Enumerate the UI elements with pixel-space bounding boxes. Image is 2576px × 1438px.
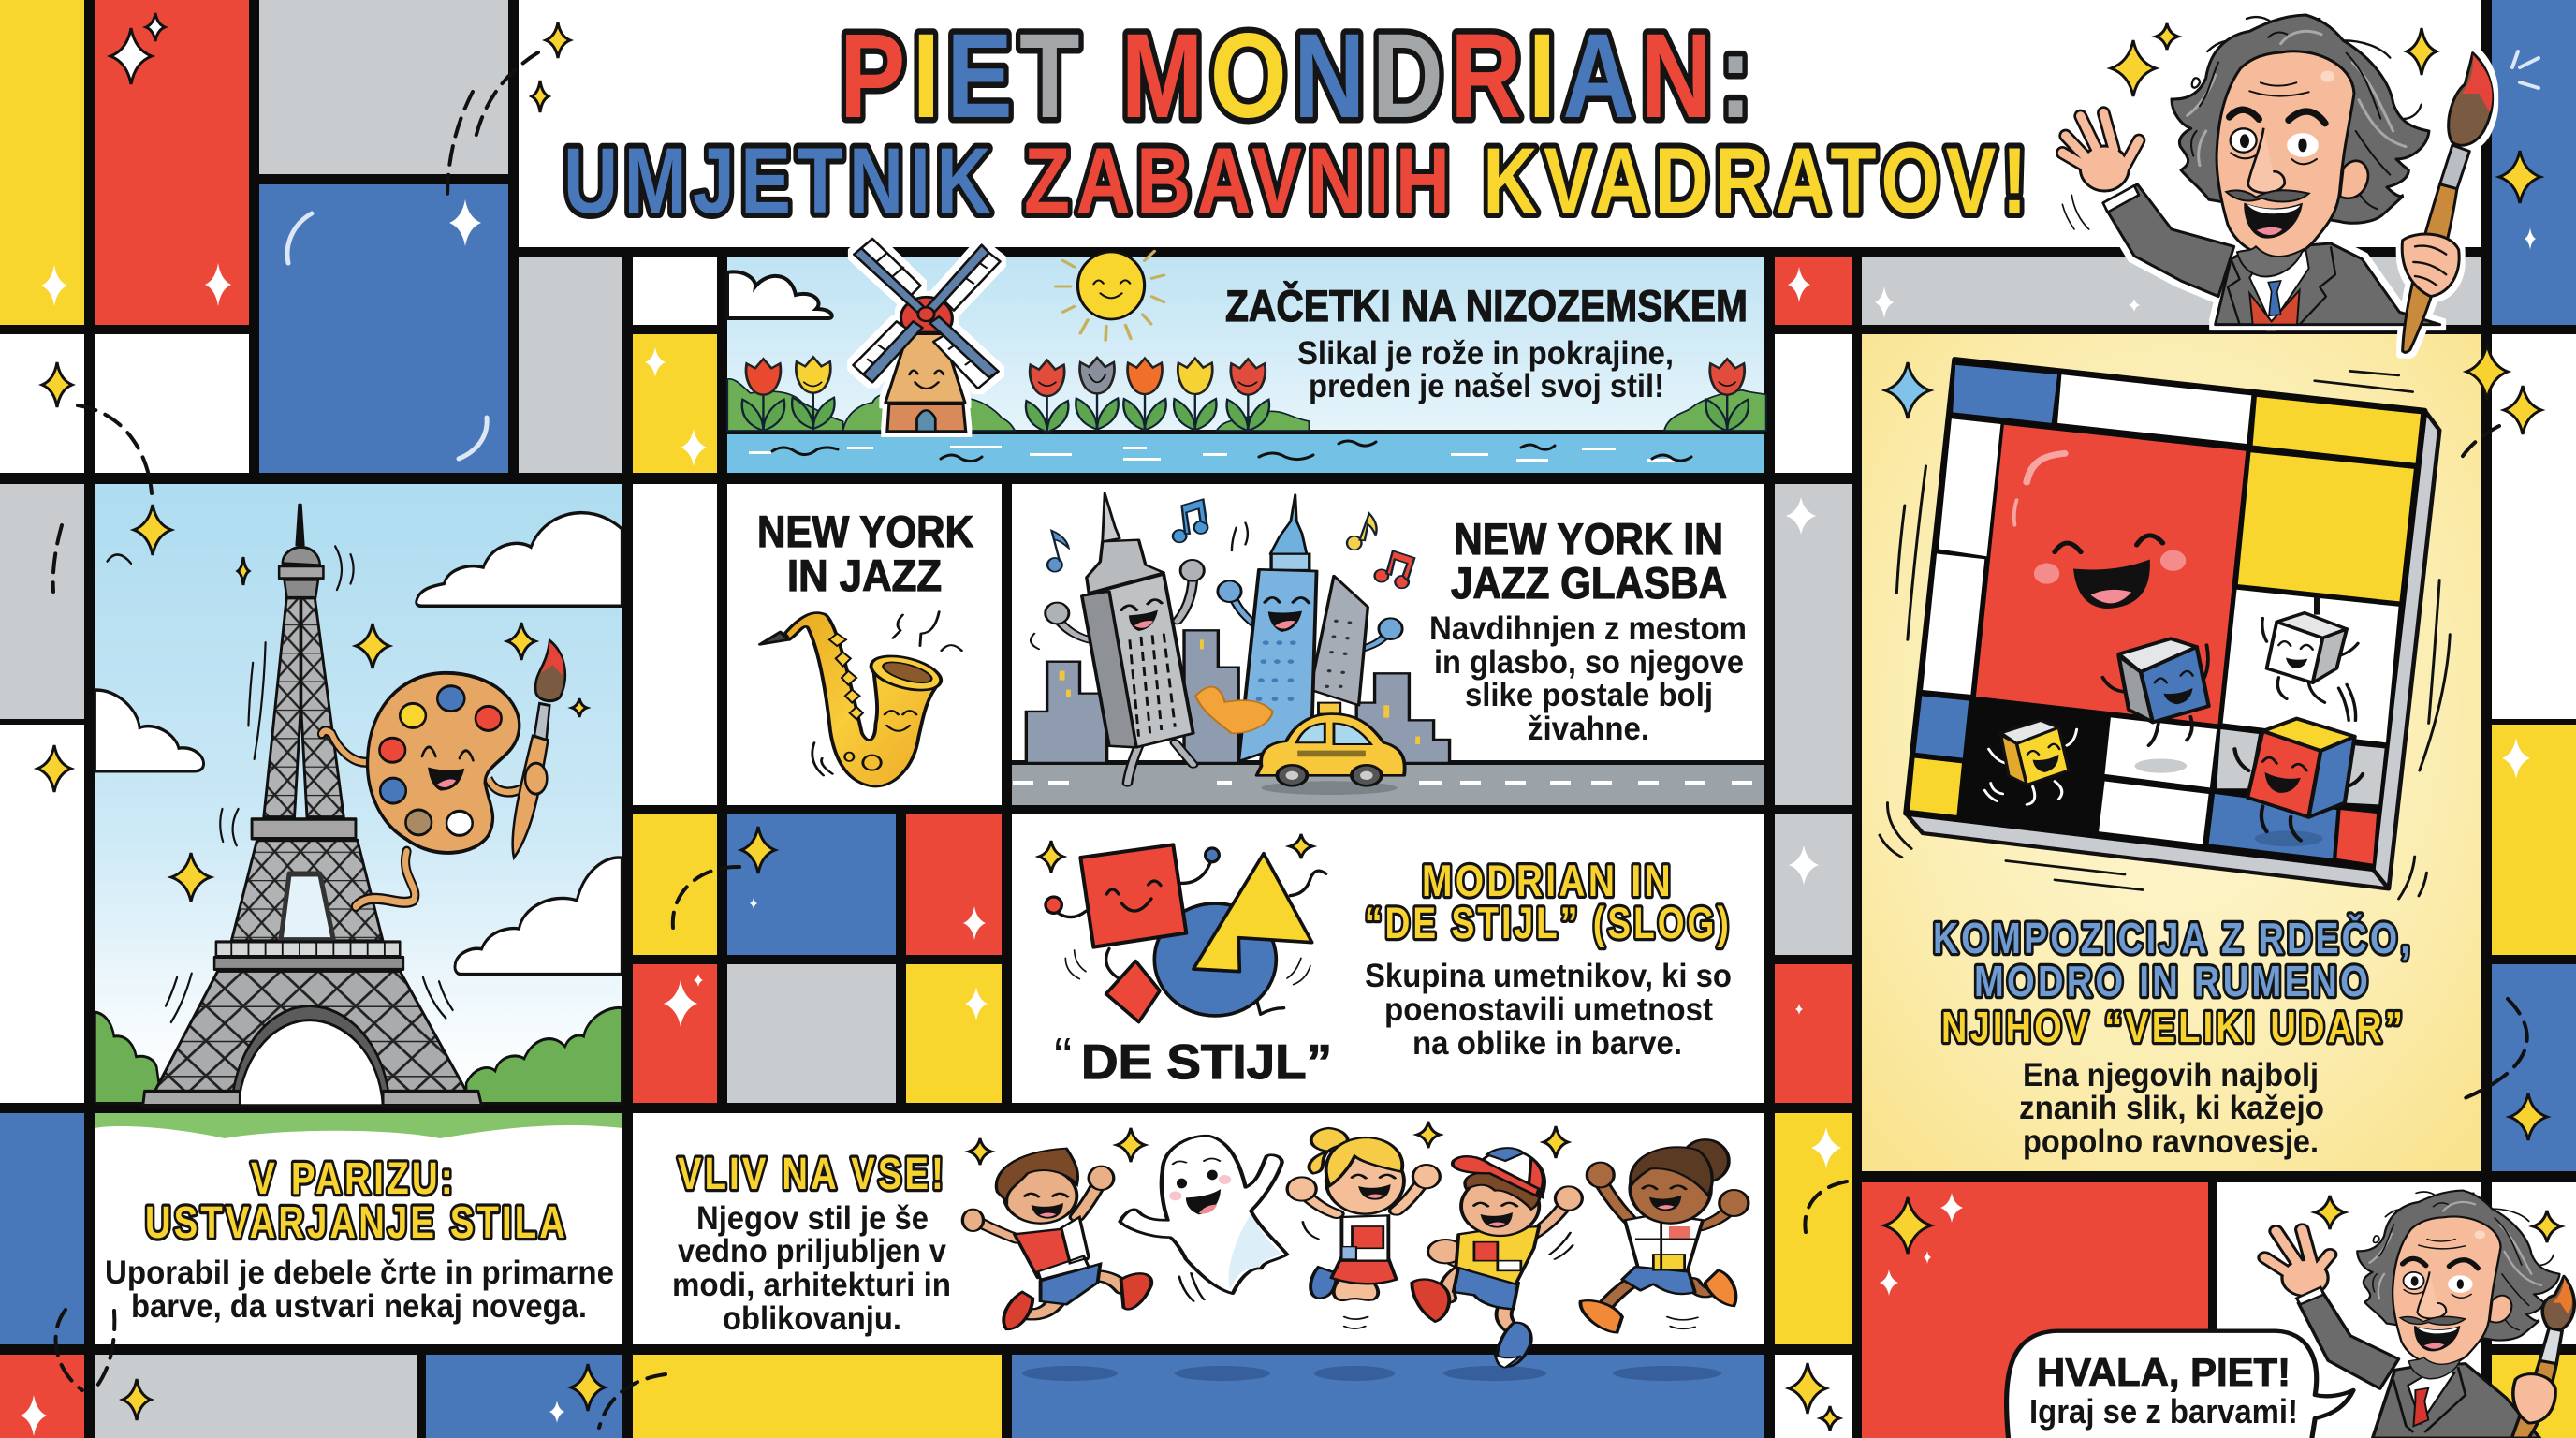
heading: Kompozicija: KOMPOZICIJA Z RDEČO, [1933, 914, 2413, 962]
text: De Stijl label: “ [1054, 1027, 1072, 1088]
text: Paris description: Uporabil je debele črte in primarne [105, 1255, 614, 1291]
text: influence description: vedno priljubljen v [678, 1233, 946, 1269]
text: jazz description [1429, 610, 1747, 747]
text: thanks subtitle: Igraj se z barvami! [2029, 1392, 2298, 1431]
text: influence description: Njegov stil je še [696, 1200, 929, 1237]
text: De Stijl description [1365, 958, 1732, 1062]
text: composition description: znanih slik, ki kažejo [2019, 1090, 2324, 1126]
windmill [854, 239, 1000, 432]
taxi [1257, 703, 1405, 795]
motion lines [1880, 371, 2450, 899]
text: jazz description: in glasbo, so njegove [1434, 644, 1744, 681]
text: Paris description [105, 1255, 614, 1325]
heading: Modrian in De Stijl: MODRIAN IN [1422, 856, 1674, 905]
character: girl with dark curls [1580, 1139, 1749, 1332]
character: white cube [2262, 613, 2358, 720]
text: jazz description: Navdihnjen z mestom [1429, 610, 1747, 647]
character: girl [1287, 1128, 1440, 1328]
text: začetki description: Slikal je rože in pokrajine, [1297, 335, 1674, 372]
icon: De Stijl shapes [1046, 844, 1326, 1022]
panel: Paris and Eiffel tower [95, 484, 622, 1344]
text: composition description: Ena njegovih najbolj [2023, 1057, 2319, 1093]
character: blue cube [2102, 638, 2209, 745]
text: influence description [672, 1200, 951, 1337]
sun [1056, 251, 1164, 340]
panel: New York and jazz saxophone [727, 484, 1002, 805]
heading: Kompozicija: MODRO IN RUMENO [1974, 957, 2371, 1005]
panel: New York in jazz glasba [1012, 484, 1764, 805]
heading: New York in jazz glasba [1451, 514, 1727, 608]
character: gray skyscraper [1046, 493, 1204, 784]
title [564, 9, 2033, 232]
heading: New York in jazz glasba: JAZZ GLASBA [1451, 558, 1727, 608]
panel: influence on everything [633, 1113, 1764, 1368]
title: PIET MONDRIAN: [840, 9, 1759, 143]
text: Paris description: barve, da ustvari nekaj novega. [131, 1288, 587, 1325]
panel: composition painting [1862, 334, 2481, 1171]
text: De Stijl description: Skupina umetnikov, ki so [1365, 958, 1732, 994]
text: composition description [2019, 1057, 2324, 1160]
heading: V Parizu: V PARIZU: [251, 1154, 456, 1204]
text: De Stijl description: na oblike in barve. [1412, 1025, 1682, 1062]
speech bubble [2007, 1331, 2353, 1438]
text: influence description: oblikovanju. [723, 1300, 901, 1337]
character: ghost [1120, 1136, 1287, 1301]
character: yellow cube [1984, 720, 2077, 804]
character: happy red square [2034, 536, 2186, 608]
heading: New York in jazz: IN JAZZ [787, 550, 942, 600]
heading: New York in jazz glasba: NEW YORK IN [1454, 514, 1723, 564]
bushes [95, 1012, 162, 1104]
text: jazz description: živahne. [1528, 711, 1649, 747]
road [1012, 763, 1764, 805]
tulips [742, 357, 1749, 432]
heading: V Parizu: USTVARJANJE STILA [145, 1198, 568, 1248]
character: blue skyscraper [1195, 494, 1402, 761]
text: začetki description: preden je našel svoj stil! [1309, 368, 1664, 404]
heading: Začetki na Nizozemskem: ZAČETKI NA NIZOZEMSKEM [1225, 281, 1748, 330]
heading: New York in jazz [757, 506, 973, 600]
text: De Stijl description: poenostavili umetnost [1384, 991, 1713, 1028]
title: UMJETNIK ZABAVNIH KVADRATOV! [564, 128, 2033, 232]
heading: New York in jazz: NEW YORK [757, 506, 973, 556]
character: boy with cap [1412, 1148, 1582, 1368]
music notes [1031, 499, 1414, 649]
character: Piet Mondrian saying thanks [2265, 1191, 2574, 1438]
character: running boy [962, 1149, 1151, 1329]
text: začetki description [1297, 335, 1674, 404]
heading: Modrian in De Stijl [1365, 856, 1732, 947]
palette character [322, 640, 565, 906]
panel: De Stijl [1012, 814, 1764, 1103]
cloud [727, 271, 832, 318]
heading: V Parizu [145, 1154, 568, 1248]
icon: saxophone [760, 611, 962, 786]
character: Piet Mondrian waving with brush [2062, 15, 2493, 352]
text: influence description: modi, arhitekturi in [672, 1267, 951, 1303]
text: composition description: popolno ravnovesje. [2023, 1123, 2319, 1160]
character: primary colour cube [2234, 719, 2363, 841]
text: thanks heading: HVALA, PIET! [2037, 1350, 2291, 1394]
heading: Vliv na vse: VLIV NA VSE! [678, 1150, 946, 1199]
bushes [727, 379, 1766, 431]
icon: tilted Mondrian painting [1906, 360, 2439, 888]
text: De Stijl label: DE STIJL” [1081, 1035, 1332, 1090]
clouds [417, 513, 622, 606]
heading: Kompozicija: NJIHOV “VELIKI UDAR” [1941, 1003, 2406, 1051]
heading: Kompozicija [1933, 914, 2413, 1051]
skyline [1026, 630, 1450, 763]
panel: windmill header [727, 239, 1766, 473]
heading: Modrian in De Stijl: “DE STIJL” (SLOG) [1365, 898, 1732, 947]
text: jazz description: slike postale bolj [1465, 677, 1713, 713]
eiffel tower [143, 505, 482, 1106]
